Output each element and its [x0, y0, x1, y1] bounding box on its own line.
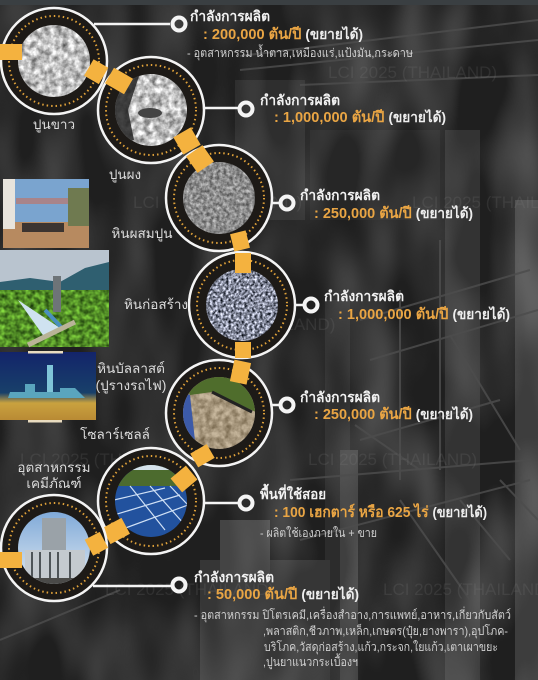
info: ballast — [300, 389, 473, 423]
info: white lime: - อุตสาหกรรม น้ำตาล,เหมืองแร่,แป้งมัน,กระดาษ — [187, 44, 413, 61]
info: chemical industry: ,พลาสติก,ชีวภาพ,เหล็ก,เกษตร(ปุ๋ย,ยางพารา),อุปโภค- — [263, 623, 508, 639]
info: cement-mix rock — [300, 187, 473, 222]
info: cement-mix rock: กำลังการผลิต — [300, 187, 380, 203]
product labels — [17, 117, 188, 491]
info: chemical industry: กำลังการผลิต — [194, 569, 274, 585]
circle: construction stone — [189, 252, 295, 358]
watermarks — [20, 63, 538, 599]
info: chemical industry: - อุตสาหกรรม ปิโตรเคมี,เครื่องสำอาง,การแพทย์,อาหาร,เกี่ยวกับสัตว์ — [194, 606, 511, 623]
product labels: โซลาร์เซลล์ — [80, 426, 150, 442]
product labels: (ปูรางรถไฟ) — [96, 378, 166, 394]
info: construction stone: : 1,000,000 ตัน/ปี (ขยายได้) — [338, 305, 510, 323]
info: solar: - ผลิตใช้เองภายใน + ขาย — [260, 526, 377, 540]
info: white lime: กำลังการผลิต — [190, 8, 270, 24]
circle: solar cells — [98, 448, 204, 554]
watermarks: LCI 2025 (THAILAND) — [328, 63, 497, 82]
product labels: หินผสมปูน — [112, 226, 172, 242]
watermarks: LCI 2025 (THAILAND) — [20, 450, 189, 469]
info: construction stone: กำลังการผลิต — [324, 288, 404, 304]
product labels: อุตสาหกรรม — [17, 460, 91, 476]
info: chemical industry: ,ปูนยาแนวกระเบื้องฯ — [263, 653, 358, 670]
circle: white lime — [0, 8, 108, 114]
info: construction stone — [324, 288, 510, 323]
info: chemical industry: บริโภค,วัสดุก่อสร้าง,แก้ว,กระจก,ใยแก้ว,เตาเผาขยะ — [264, 640, 498, 655]
info: chemical industry: : 50,000 ตัน/ปี (ขยายได้) — [207, 585, 359, 603]
info: chemical industry — [194, 569, 511, 670]
info: solar: : 100 เฮกตาร์ หรือ 625 ไร่ (ขยายได้) — [274, 502, 487, 521]
photo: factory gate — [3, 179, 89, 248]
circle: cement powder — [98, 57, 204, 163]
info: cement powder: : 1,000,000 ตัน/ปี (ขยายได้) — [274, 108, 446, 126]
watermarks: LCI 2025 (THAILAND) — [105, 580, 274, 599]
watermarks: LCI 2025 (THAILAND) — [133, 193, 302, 212]
product labels: หินก่อสร้าง — [124, 297, 188, 312]
info: white lime: : 200,000 ตัน/ปี (ขยายได้) — [203, 25, 363, 43]
connector lines and nodes — [93, 18, 318, 592]
product labels: หินบัลลาสต์ — [97, 360, 165, 376]
circle: chemical industry — [0, 495, 108, 601]
info: white lime — [187, 8, 413, 61]
info: ballast: กำลังการผลิต — [300, 389, 380, 405]
circle: ballast railway — [166, 360, 272, 467]
photo: cement plant landscape — [0, 250, 109, 347]
product labels: ปูนขาว — [33, 117, 75, 133]
info: solar: พื้นที่ใช้สอย — [260, 483, 326, 502]
watermarks: (THAILAND) — [240, 315, 335, 334]
photo: night plant — [0, 351, 96, 422]
info: solar — [260, 483, 487, 540]
circle: cement-mix rock — [166, 145, 272, 252]
info: cement powder — [260, 92, 446, 126]
info: ballast: : 250,000 ตัน/ปี (ขยายได้) — [314, 405, 473, 423]
product labels: เคมีภัณฑ์ — [26, 475, 82, 491]
watermarks: LCI 2025 (THAILAND) — [308, 450, 477, 469]
product labels: ปูนผง — [109, 167, 141, 183]
info: cement powder: กำลังการผลิต — [260, 92, 340, 108]
info: cement-mix rock: : 250,000 ตัน/ปี (ขยายได้) — [314, 204, 473, 222]
